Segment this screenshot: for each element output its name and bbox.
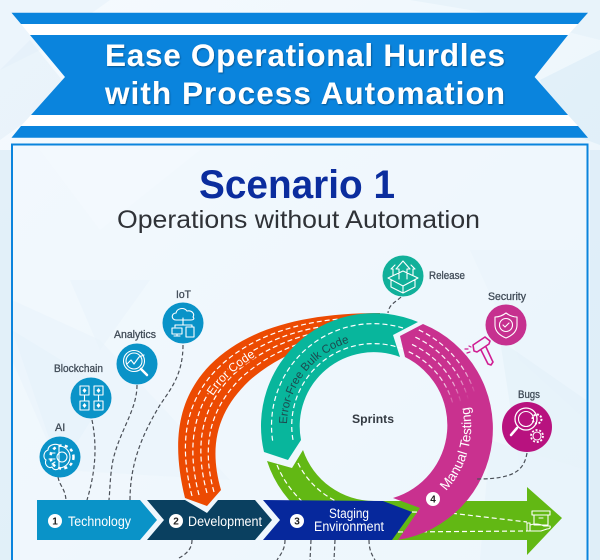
- label: Sprints: Sprints: [352, 412, 394, 426]
- icon: Bugs: [477, 389, 552, 479]
- icon: hand with box: [527, 511, 550, 531]
- label: Manual Testing: Manual Testing: [440, 408, 473, 490]
- banner main ribbon: [30, 35, 568, 115]
- chevron 1: Technology: Technology: [68, 514, 131, 529]
- subheading: Operations without Automation: [117, 206, 480, 234]
- icon: Release: [382, 256, 465, 313]
- connectors: technology: [58, 345, 183, 500]
- label: IoT: IoT: [176, 289, 191, 301]
- green arrow: [383, 487, 562, 555]
- orange arc: Error Code: [178, 313, 380, 506]
- title text: Ease Operational Hurdles: [105, 37, 505, 73]
- chevron 3: Staging Environment: Environment: [314, 519, 384, 534]
- label: Error Code: Error Code: [206, 352, 256, 396]
- pink arc: Manual Testing: 4: [430, 494, 436, 506]
- heading: scenario: Scenario 1: [199, 163, 395, 207]
- icon: Security: [486, 291, 527, 346]
- chevron 2: Development: [147, 500, 272, 540]
- label: Blockchain: Blockchain: [54, 363, 103, 375]
- title text: with Process Automation: [104, 75, 505, 111]
- icon: AI: [40, 422, 80, 478]
- teal arc: Error-Free Bulk Code: [261, 313, 418, 460]
- label: AI: AI: [55, 422, 65, 434]
- title banner: [12, 13, 588, 138]
- chevron 2: Development: 2: [173, 516, 179, 528]
- icon: Blockchain: [54, 363, 112, 418]
- connectors below chevrons: [177, 540, 375, 560]
- banner white gap top: [21, 24, 578, 35]
- chevron 1: Technology: [37, 500, 157, 540]
- banner white gap bottom: [21, 115, 578, 126]
- chevron 3: Staging Environment: [263, 500, 412, 540]
- label: Analytics: Analytics: [114, 329, 157, 341]
- chevron 1: Technology: 1: [52, 516, 58, 528]
- chevron 3: Staging Environment: Staging: [329, 506, 369, 521]
- title text: [104, 37, 505, 111]
- chevron 3: Staging Environment: 3: [294, 516, 300, 528]
- banner top stripe: [12, 13, 588, 24]
- icon: gavel: [465, 337, 493, 365]
- label: Bugs: Bugs: [518, 389, 541, 401]
- step number 4: [426, 492, 440, 506]
- icon: IoT: [162, 289, 204, 344]
- content frame: [12, 144, 588, 560]
- label: Error-Free Bulk Code: Error-Free Bulk Code: [279, 337, 348, 424]
- banner bottom stripe: [12, 126, 588, 138]
- green arc: [267, 450, 374, 539]
- pink arc: Manual Testing: [393, 324, 493, 540]
- process chevrons: [37, 500, 412, 540]
- label: Security: Security: [488, 291, 527, 303]
- label: Release: Release: [429, 270, 465, 282]
- icon: Analytics: [114, 329, 158, 384]
- chevron 2: Development: Development: [188, 514, 262, 529]
